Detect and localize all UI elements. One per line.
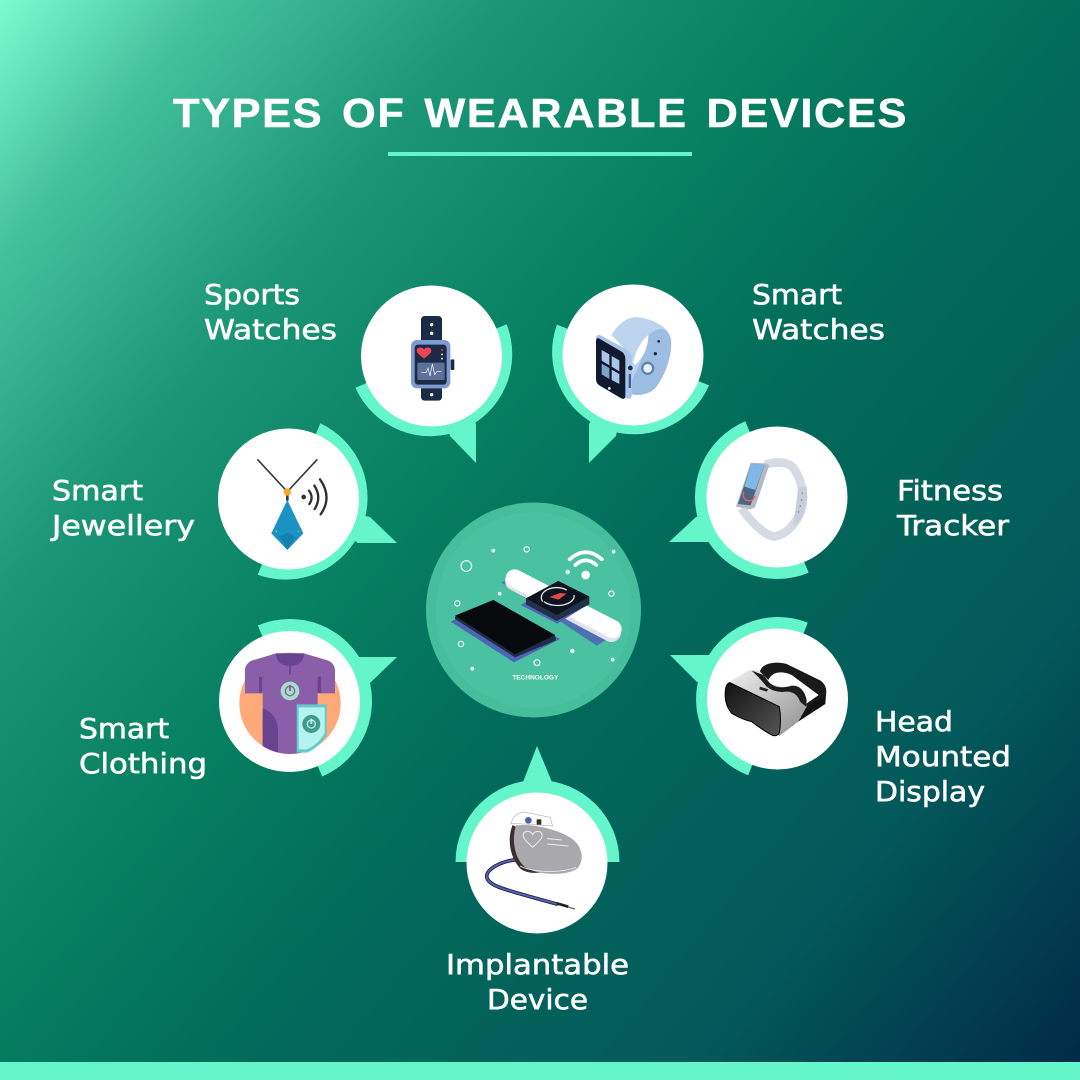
bubble ring xyxy=(258,619,372,776)
bubble pointer xyxy=(289,499,397,543)
icon: wearable patch xyxy=(451,575,620,662)
icon: smart watch xyxy=(596,317,671,399)
icon: VR headset xyxy=(725,663,826,736)
icon: pendant necklace xyxy=(257,459,327,550)
title underline xyxy=(388,152,692,156)
icon: fitness band xyxy=(736,463,807,537)
bubble ring xyxy=(552,325,709,434)
bubble pointer xyxy=(589,355,633,463)
hub sparkle dots xyxy=(455,547,615,670)
label: smart clothing: Clothing xyxy=(79,747,207,780)
bubble pointer xyxy=(669,497,777,542)
bubble ring xyxy=(696,617,808,775)
label: sports watches: Watches xyxy=(204,313,337,346)
label: smart jewellery: Jewellery xyxy=(50,509,195,542)
label: smart jewellery xyxy=(50,474,195,542)
bubble ring xyxy=(355,324,512,436)
label: smart watches: Smart xyxy=(752,278,842,311)
label: fitness tracker: Fitness xyxy=(897,474,1003,507)
bubble pointer xyxy=(670,655,778,699)
title: TYPES OF WEARABLE DEVICES xyxy=(173,90,908,136)
node: smart clothing xyxy=(219,619,397,776)
label: smart watches: Watches xyxy=(752,313,885,346)
node: fitness tracker xyxy=(669,421,848,579)
label: smart jewellery: Smart xyxy=(52,474,143,507)
node: head mounted display xyxy=(670,617,848,775)
bubble pointer xyxy=(523,746,552,800)
bottom bar xyxy=(0,1062,1080,1080)
center hub: technology xyxy=(426,502,641,718)
icon: smart shirt xyxy=(239,653,341,760)
label: implantable device xyxy=(446,948,629,1016)
icon: sports watch xyxy=(411,316,454,401)
label: sports watches: Sports xyxy=(204,278,300,311)
bubble pointer xyxy=(290,657,397,701)
label: fitness tracker: Tracker xyxy=(896,509,1010,542)
label: head mounted display: Display xyxy=(875,775,985,808)
label: implantable device: Device xyxy=(487,983,588,1016)
bubble ring xyxy=(695,421,809,579)
node: smart watches xyxy=(552,284,709,463)
label: head mounted display xyxy=(875,705,1011,808)
label: smart watches xyxy=(752,278,885,346)
icon: pacemaker xyxy=(487,812,582,909)
bubble pointer xyxy=(431,356,476,463)
label: head mounted display: Head xyxy=(875,705,953,738)
bubble ring xyxy=(258,423,368,580)
node: smart jewellery xyxy=(218,423,397,580)
hub label: TECHNOLOGY xyxy=(512,675,559,682)
label: fitness tracker xyxy=(896,474,1010,542)
label: smart clothing xyxy=(79,712,207,780)
node: sports watches xyxy=(355,286,512,463)
label: implantable device: Implantable xyxy=(446,948,629,981)
node: implantable device xyxy=(456,746,620,934)
label: sports watches xyxy=(204,278,337,346)
bubble ring xyxy=(456,780,620,862)
label: head mounted display: Mounted xyxy=(875,740,1011,773)
label: smart clothing: Smart xyxy=(79,712,169,745)
icon: wifi xyxy=(570,552,602,579)
